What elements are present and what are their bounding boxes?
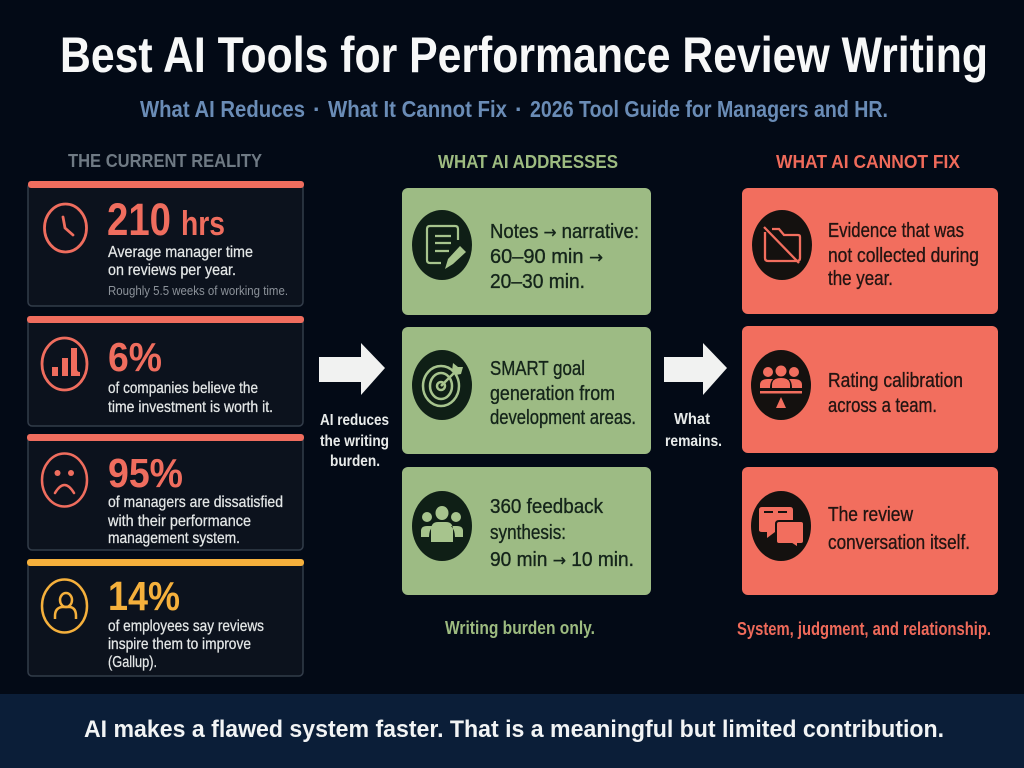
panel: 210 hrs stat — [28, 181, 304, 306]
subtitle: · — [313, 96, 321, 122]
panel: 360 feedback — [402, 467, 651, 595]
subtitle: · — [515, 96, 523, 122]
text — [490, 357, 636, 429]
icon: team on balance — [751, 350, 811, 420]
footer banner — [0, 694, 1024, 768]
icon: clock — [44, 204, 86, 252]
text: development areas. — [490, 406, 636, 429]
arrow: what remains — [664, 343, 727, 395]
text: The review — [828, 503, 913, 526]
panel: evidence — [742, 188, 998, 314]
heading: what AI cannot fix: WHAT AI CANNOT FIX — [776, 151, 961, 172]
text — [490, 495, 634, 571]
arrow caption: what remains: remains. — [665, 433, 722, 450]
text: conversation itself. — [828, 531, 970, 554]
text: 20–30 min. — [490, 270, 585, 293]
text: Evidence that was — [828, 219, 964, 242]
icon: bar chart — [42, 338, 87, 390]
panel: 95% stat — [27, 434, 304, 550]
text — [490, 220, 639, 293]
arrow caption: AI reduces the writing burden: the writing — [320, 433, 389, 450]
arrow caption: AI reduces the writing burden — [320, 412, 389, 470]
footer text: AI makes a flawed system faster. That is a meaningful but limited contribution. — [84, 716, 944, 743]
panel: rating calibration — [742, 326, 998, 453]
icon: target — [412, 350, 472, 420]
text — [828, 369, 963, 417]
text: Rating calibration — [828, 369, 963, 392]
note: Roughly 5.5 weeks of working time. — [108, 283, 288, 298]
text: across a team. — [828, 394, 937, 417]
heading: what AI addresses: WHAT AI ADDRESSES — [438, 151, 618, 172]
subtitle: 2026 Tool Guide for Managers and HR. — [530, 96, 888, 122]
panel: review conversation — [742, 467, 998, 595]
text: SMART goal — [490, 357, 585, 380]
panel: notes to narrative — [402, 188, 651, 315]
text: generation from — [490, 382, 615, 405]
caption: writing burden only: Writing burden only. — [445, 618, 595, 638]
arrow caption: what remains — [665, 411, 722, 450]
panel: 6% stat — [27, 316, 304, 426]
arrow caption: what remains: What — [674, 411, 711, 428]
icon: speech bubbles — [751, 491, 811, 561]
heading: the current reality: THE CURRENT REALITY — [68, 150, 263, 171]
text: not collected during — [828, 244, 979, 267]
stat: 95%: 95% — [108, 450, 183, 496]
description: time investment is worth it. — [108, 399, 273, 416]
description — [108, 244, 253, 279]
panel: SMART goal — [402, 327, 651, 454]
description: of companies believe the — [108, 380, 258, 397]
text: the year. — [828, 267, 893, 290]
icon: person — [42, 580, 87, 632]
text — [828, 503, 970, 554]
description — [108, 380, 273, 416]
description: management system. — [108, 530, 240, 547]
subtitle: What AI Reduces — [140, 96, 305, 122]
description: of employees say reviews — [108, 618, 264, 635]
description: with their performance — [107, 513, 251, 530]
description: inspire them to improve — [108, 636, 251, 653]
text: 90 min → 10 min. — [490, 548, 634, 571]
panel: 14% stat — [27, 559, 304, 676]
stat: 14%: 14% — [108, 573, 180, 619]
stat: 210 hrs: 210 — [107, 194, 171, 245]
subtitle — [140, 96, 888, 122]
arrow caption: AI reduces the writing burden: burden. — [330, 453, 380, 470]
text: synthesis: — [490, 521, 566, 544]
text: Notes → narrative: — [490, 220, 639, 243]
text: 60–90 min → — [490, 245, 603, 268]
arrow: AI reduces — [319, 343, 385, 395]
subtitle: What It Cannot Fix — [328, 96, 507, 122]
description: on reviews per year. — [108, 262, 236, 279]
text: 360 feedback — [490, 495, 604, 518]
icon: team — [412, 491, 472, 561]
description: of managers are dissatisfied — [108, 494, 283, 511]
description: Average manager time — [108, 244, 253, 261]
stat: 210 hrs: hrs — [181, 205, 225, 243]
description: (Gallup). — [108, 654, 157, 671]
description — [108, 618, 264, 671]
icon: sad face — [42, 454, 87, 506]
stat: 6%: 6% — [108, 334, 162, 380]
text — [828, 219, 979, 290]
icon: crossed folder — [752, 210, 812, 280]
icon: document and pencil — [412, 210, 472, 280]
description — [107, 494, 283, 547]
arrow caption: AI reduces the writing burden: AI reduces — [320, 412, 389, 429]
stat: 210 hrs — [107, 194, 225, 245]
